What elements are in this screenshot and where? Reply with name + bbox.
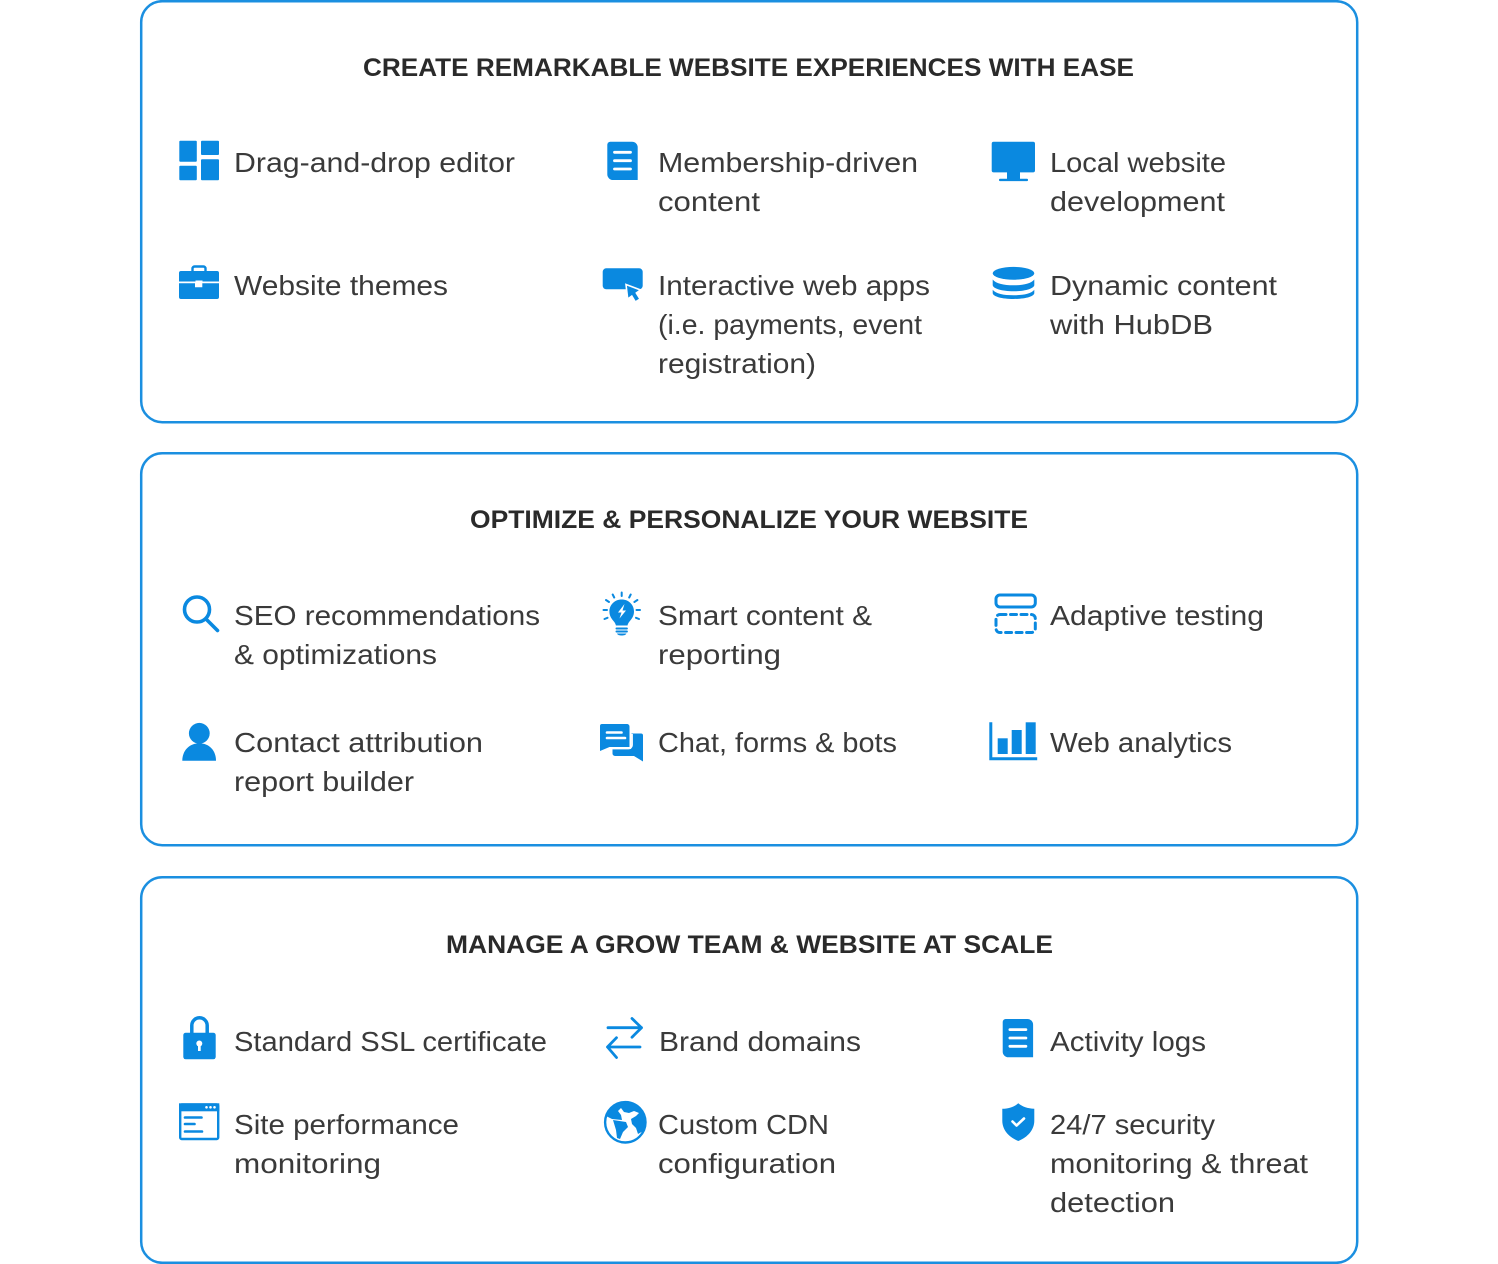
text: local website development: Local website: [1050, 147, 1226, 178]
icon: chat bubbles: [600, 724, 643, 762]
heading: manage: MANAGE A GROW TEAM & WEBSITE AT SCALE: [446, 931, 1053, 959]
text: adaptive testing: Adaptive testing: [1050, 600, 1264, 631]
text: dynamic content with hubdb: with HubDB: [1049, 309, 1213, 340]
text: seo recommendations: [234, 600, 540, 670]
chart icon: web analytics: [989, 722, 1037, 760]
heading: create: CREATE REMARKABLE WEBSITE EXPERIENCES WITH EASE: [363, 54, 1134, 82]
icon: globe: [605, 1102, 646, 1143]
text: smart content and reporting: reporting: [658, 639, 781, 670]
text: custom cdn configuration: Custom CDN: [658, 1109, 829, 1140]
icon: swap arrows: [608, 1018, 642, 1058]
text: smart content and reporting: Smart content &: [658, 600, 872, 631]
text: dynamic content with hubdb: [1049, 270, 1277, 340]
icon: database: [993, 267, 1034, 299]
text: custom cdn configuration: [658, 1109, 836, 1179]
text: brand domains: Brand domains: [659, 1026, 861, 1057]
text: custom cdn configuration: configuration: [658, 1148, 836, 1179]
text: membership-driven content: content: [658, 186, 760, 217]
text: smart content and reporting: [658, 600, 872, 670]
text: interactive web apps: registration): [658, 348, 816, 379]
panel: create remarkable website experiences: [141, 1, 1357, 422]
panel: manage a grow team: [141, 877, 1357, 1263]
text: membership-driven content: [658, 147, 918, 217]
text: site performance monitoring: [234, 1109, 459, 1179]
text: interactive web apps: [658, 270, 930, 379]
icon: monitor: [992, 142, 1035, 181]
icon: person: [182, 723, 216, 761]
text: contact attribution report builder: report builder: [234, 766, 414, 797]
text: interactive web apps: Interactive web apps: [658, 270, 930, 301]
text: standard ssl certificate: Standard SSL certificate: [234, 1026, 547, 1057]
text: membership-driven content: Membership-driven: [658, 147, 918, 178]
icon: interactive cursor on screen: [603, 268, 643, 302]
icon: magnifying glass: [184, 597, 218, 630]
icon: adaptive test layouts: [996, 595, 1035, 632]
icon: drag and drop grid: [179, 141, 219, 180]
text: security monitoring and threat detection: detection: [1050, 1187, 1175, 1218]
text: contact attribution report builder: [234, 727, 483, 797]
icon: activity log document: [1003, 1019, 1033, 1057]
text: security monitoring and threat detection: monitoring & threat: [1050, 1148, 1308, 1179]
text: web analytics: Web analytics: [1050, 727, 1232, 758]
icon: document: [607, 142, 638, 180]
text: seo recommendations: & optimizations: [234, 639, 437, 670]
panel: optimize and personalize: [141, 453, 1357, 845]
text: local website development: development: [1050, 186, 1225, 217]
text: drag-and-drop editor: Drag-and-drop editor: [234, 147, 515, 178]
icon: briefcase: [179, 266, 219, 299]
text: interactive web apps: (i.e. payments, event: [658, 309, 922, 340]
text: site performance monitoring: monitoring: [234, 1148, 381, 1179]
text: website themes: Website themes: [234, 270, 448, 301]
icon: security shield: [1002, 1103, 1034, 1141]
icon: browser window: [179, 1103, 219, 1139]
icon: padlock: [183, 1018, 216, 1059]
text: seo recommendations: SEO recommendations: [234, 600, 540, 631]
text: activity logs: Activity logs: [1050, 1026, 1206, 1057]
text: site performance monitoring: Site performance: [234, 1109, 459, 1140]
text: dynamic content with hubdb: Dynamic content: [1050, 270, 1277, 301]
text: contact attribution report builder: Contact attribution: [234, 727, 483, 758]
text: security monitoring and threat detection: 24/7 security: [1050, 1109, 1215, 1140]
text: local website development: [1050, 147, 1226, 217]
text: security monitoring and threat detection: [1050, 1109, 1308, 1218]
icon: light bulb: [604, 592, 640, 636]
heading: optimize: OPTIMIZE & PERSONALIZE YOUR WEBSITE: [470, 506, 1028, 534]
text: chat, forms and bots: Chat, forms & bots: [658, 727, 897, 758]
